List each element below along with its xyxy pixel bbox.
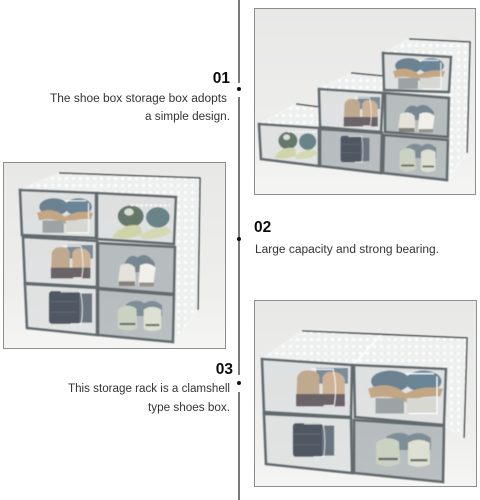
photo: six stacked shoe boxes xyxy=(4,162,226,348)
box: middle left xyxy=(23,237,97,287)
box: bottom left xyxy=(264,414,352,473)
box: right middle xyxy=(385,93,449,137)
box: top right xyxy=(97,193,176,244)
box: right top xyxy=(383,53,451,92)
box: top left xyxy=(20,190,96,238)
text block: feature 1 xyxy=(50,93,230,123)
photo: staircase arrangement of shoe boxes xyxy=(254,8,476,194)
box: centre lower xyxy=(320,129,382,173)
heading: 01: 01 xyxy=(213,70,230,87)
box: top left xyxy=(262,359,352,417)
photo: four clamshell shoe boxes xyxy=(254,300,476,486)
timeline: vertical line with markers xyxy=(237,0,241,500)
text block: feature 3: type shoes box. xyxy=(148,402,230,414)
box: bottom right xyxy=(98,289,174,342)
text block: feature 1: a simple design. xyxy=(145,111,230,123)
text block: feature 3 xyxy=(68,383,230,414)
box: bottom left xyxy=(25,284,97,335)
text block: feature 3: This storage rack is a clamshell xyxy=(68,383,230,395)
box: middle right xyxy=(98,243,175,294)
box: left slippers xyxy=(259,124,319,166)
box: right bottom xyxy=(383,135,448,180)
heading: 03: 03 xyxy=(216,361,233,378)
box: bottom right xyxy=(354,420,444,482)
heading: 02: 02 xyxy=(254,219,271,236)
box: top right xyxy=(354,365,446,425)
text block: feature 2: Large capacity and strong bearing. xyxy=(255,244,439,256)
text block: feature 1: The shoe box storage box adopts xyxy=(50,93,227,105)
box: centre upper xyxy=(319,89,383,132)
